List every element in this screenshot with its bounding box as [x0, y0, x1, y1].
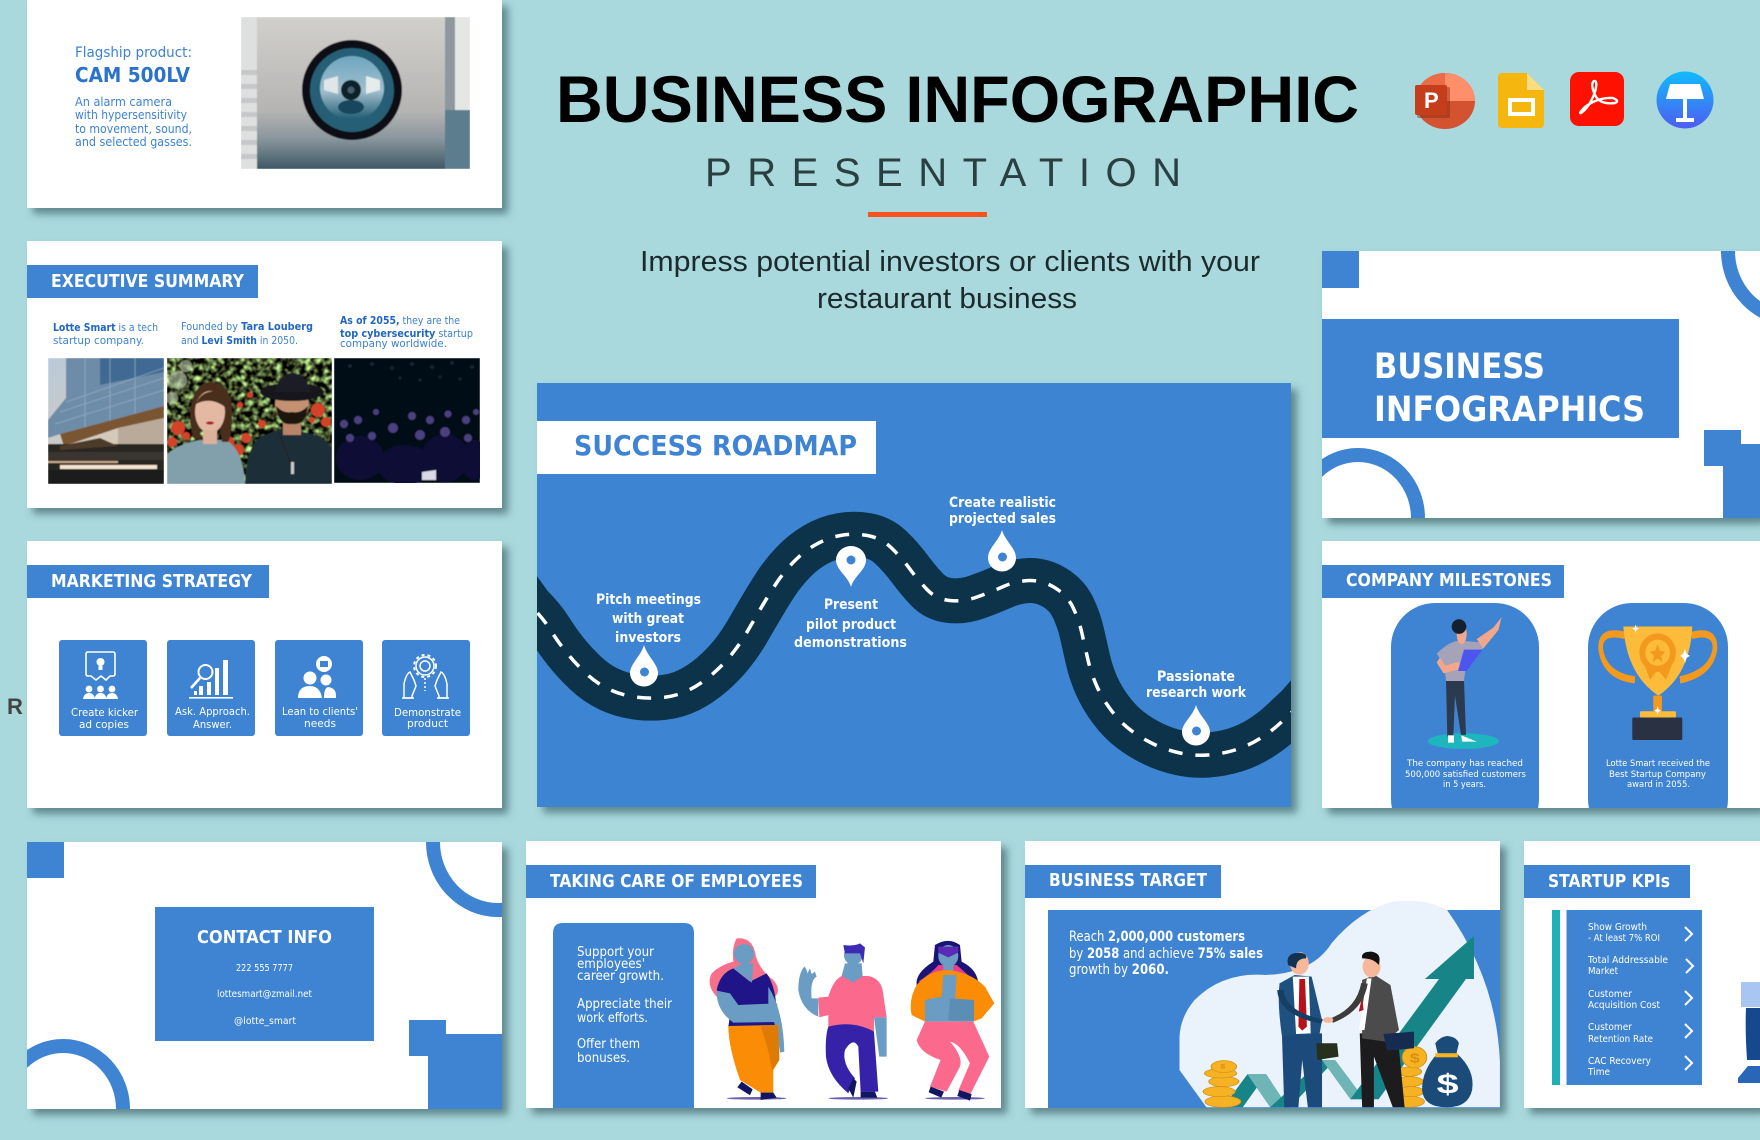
card: ask approach answer: [167, 640, 255, 736]
panel: business infographics cover: [1322, 251, 1760, 530]
label: pitch meetings: Pitch meetings: [596, 592, 701, 608]
text: three summary columns: [53, 314, 473, 350]
label: present pilot product: demonstrations: [794, 635, 907, 651]
panel: business target: [1025, 841, 1500, 1108]
caption: [1405, 759, 1526, 790]
text: three summary columns: Founded by Tara Louberg: [181, 320, 313, 333]
text: flagship product: Flagship product:: [75, 45, 192, 61]
heading: taking care of employees: TAKING CARE OF EMPLOYEES: [550, 871, 803, 892]
illustration: handshake and growth: [1180, 901, 1500, 1107]
photo: founders: [166, 358, 332, 484]
card: ask approach answer: Ask. Approach.: [175, 705, 250, 718]
KPI list: Retention Rate: [1588, 1034, 1653, 1045]
illustration: woman one: [710, 938, 787, 1100]
panel: marketing strategy: [27, 541, 502, 808]
heading: success roadmap: SUCCESS ROADMAP: [574, 429, 857, 462]
label: present pilot product: pilot product: [806, 617, 896, 633]
icon: PDF: [1570, 72, 1624, 126]
orange divider: [868, 212, 987, 217]
tagline: Impress potential investors or clients with your: [640, 246, 1260, 278]
text card: employee care: Offer them: [577, 1037, 640, 1052]
cover title box: BUSINESS: [1374, 347, 1545, 387]
card: lean to clients' needs: needs: [304, 717, 336, 730]
KPI list: Total Addressable: [1587, 955, 1668, 966]
icon: Keynote: [1656, 72, 1714, 128]
photo: office building: [48, 358, 164, 484]
text: three summary columns: Lotte Smart is a tech: [53, 321, 158, 334]
KPI list: CAC Recovery: [1588, 1056, 1651, 1067]
text: flagship product: An alarm camera: [75, 94, 172, 109]
panel: executive summary: [27, 241, 502, 508]
label: research work: research work: [1146, 685, 1246, 701]
pin: pitch meetings: [630, 645, 658, 686]
icon: presentation bulb and audience: [83, 652, 118, 699]
heading: taking care of employees: [526, 865, 816, 898]
text: target statement: by 2058 and achieve 75% sales: [1069, 946, 1263, 962]
panel: startup KPIs: [1524, 841, 1760, 1108]
label: present pilot product: Present: [824, 597, 878, 613]
caption: award in 2055.: [1627, 780, 1690, 790]
pin: research work: [1182, 705, 1210, 746]
text card: employee care: bonuses.: [577, 1051, 630, 1066]
icon: PowerPoint: P: [1424, 88, 1439, 113]
label: pitch meetings: [596, 592, 701, 646]
text: target statement: growth by 2060.: [1069, 962, 1169, 978]
card: ask approach answer: Answer.: [193, 718, 232, 731]
subtitle: presentation: PRESENTATION: [705, 151, 1181, 195]
KPI list: Customer: [1588, 1022, 1633, 1033]
text: flagship product: with hypersensitivity: [75, 107, 188, 122]
KPI list: Acquisition Cost: [1588, 1000, 1660, 1011]
card: customers milestone: [1391, 603, 1539, 808]
contact details box: [155, 907, 374, 1041]
icon: hands with gear bulb: [402, 655, 449, 698]
label: pitch meetings: with great: [612, 611, 684, 627]
contact details box: lottesmart@zmail.net: [217, 989, 312, 1000]
KPI list: [1566, 910, 1702, 1085]
cropped letter at left edge: R: [7, 694, 23, 719]
text card: employee care: Support your: [577, 945, 655, 960]
label: projected sales: projected sales: [949, 511, 1056, 527]
text: target statement: Reach 2,000,000 customers: [1069, 929, 1245, 945]
label: present pilot product: [794, 597, 907, 651]
text: flagship product: to movement, sound,: [75, 121, 192, 136]
heading: company milestones: COMPANY MILESTONES: [1346, 570, 1552, 591]
heading: business target: BUSINESS TARGET: [1049, 870, 1208, 891]
text: flagship product: [75, 45, 192, 149]
panel: company milestones: [1322, 541, 1760, 843]
illustration: woman two: [911, 941, 994, 1101]
target box: [1048, 910, 1500, 1108]
heading: startup KPIs: STARTUP KPIs: [1548, 871, 1670, 892]
text: flagship product: CAM 500LV: [75, 63, 190, 87]
card: demonstrate product: [382, 640, 470, 736]
illustration: partial figure with laptop: [1738, 982, 1760, 1083]
caption: Lotte Smart received the: [1606, 759, 1710, 769]
illustration: handshake and growth: $: [1410, 1052, 1420, 1066]
text: three summary columns: startup company.: [53, 334, 144, 347]
icon: people with like bubble: [298, 656, 336, 698]
icon: PowerPoint: [1415, 73, 1475, 129]
KPI list: - At least 7% ROI: [1588, 933, 1660, 944]
illustration: trophy: [1601, 624, 1715, 740]
card: create kicker ad copies: [59, 640, 147, 736]
label: projected sales: Create realistic: [949, 495, 1056, 511]
contact details box: @lotte_smart: [234, 1016, 296, 1027]
KPI list: Customer: [1588, 989, 1633, 1000]
text: flagship product: and selected gasses.: [75, 134, 192, 149]
road: [505, 534, 1330, 755]
illustration: handshake and growth: $: [1437, 1069, 1459, 1100]
card: award milestone: [1588, 603, 1728, 808]
caption: in 5 years.: [1443, 780, 1486, 790]
heading: company milestones: [1322, 565, 1564, 598]
photo: audience: [334, 358, 489, 485]
text: three summary columns: and Levi Smith in 2050.: [181, 334, 298, 347]
icon: magnifier and bars: [189, 660, 233, 699]
label: research work: [1146, 669, 1246, 701]
text card: employee care: career growth.: [577, 969, 664, 984]
caption: [1606, 759, 1710, 787]
panel: flagship product: [27, 0, 502, 208]
KPI list: Time: [1587, 1067, 1610, 1078]
heading: marketing strategy: MARKETING STRATEGY: [51, 571, 253, 592]
text card: employee care: [553, 923, 694, 1108]
label: research work: Passionate: [1157, 669, 1235, 685]
tagline: [640, 246, 1260, 315]
card: demonstrate product: product: [407, 717, 449, 730]
card: create kicker ad copies: Create kicker: [71, 706, 138, 719]
text card: employee care: work efforts.: [577, 1011, 648, 1026]
heading: business target: [1025, 865, 1221, 898]
illustration: handshake and growth: $: [1221, 1063, 1225, 1070]
card: lean to clients' needs: Lean to clients': [282, 705, 358, 718]
heading: executive summary: [27, 265, 258, 298]
heading: marketing strategy: [27, 565, 269, 598]
text: three summary columns: company worldwide.: [340, 337, 447, 350]
icon: Google Slides: [1498, 73, 1544, 128]
card: demonstrate product: Demonstrate: [394, 706, 461, 719]
text: three summary columns: top cybersecurity startup: [340, 327, 473, 340]
title: BUSINESS INFOGRAPHIC: [556, 62, 1359, 136]
card: lean to clients' needs: [275, 640, 363, 736]
illustration: man: [798, 943, 888, 1100]
label: pitch meetings: investors: [615, 630, 681, 646]
panel: contact info: [27, 842, 514, 1120]
text card: employee care: employees': [577, 957, 645, 972]
caption: Best Startup Company: [1609, 770, 1707, 780]
caption: 500,000 satisfied customers: [1405, 770, 1526, 780]
KPI list: Show Growth: [1588, 922, 1647, 933]
cover title box: INFOGRAPHICS: [1374, 390, 1645, 430]
card: create kicker ad copies: ad copies: [79, 718, 129, 731]
text: three summary columns: As of 2055, they are the: [340, 314, 460, 327]
text: target statement: [1069, 929, 1263, 978]
caption: The company has reached: [1406, 759, 1523, 769]
photo: security camera: [241, 17, 470, 169]
illustration: person with clipboard: [1428, 617, 1502, 749]
text card: employee care: Appreciate their: [577, 997, 673, 1012]
heading: startup KPIs: [1524, 865, 1690, 898]
contact details box: CONTACT INFO: [197, 927, 332, 948]
panel: success roadmap: [505, 383, 1330, 807]
pin: projected sales: [988, 530, 1016, 572]
panel: taking care of employees: [526, 841, 1001, 1108]
label: projected sales: [949, 495, 1056, 527]
pin: present pilot product: [836, 546, 866, 587]
heading: executive summary: EXECUTIVE SUMMARY: [51, 271, 245, 292]
heading: success roadmap: [537, 421, 876, 474]
cover title box: [1322, 319, 1679, 438]
teal accent bar: [1552, 910, 1560, 1085]
tagline: restaurant business: [817, 283, 1077, 315]
contact details box: 222 555 7777: [236, 963, 293, 974]
KPI list: Market: [1588, 966, 1618, 977]
chevrons: [1685, 927, 1693, 1070]
